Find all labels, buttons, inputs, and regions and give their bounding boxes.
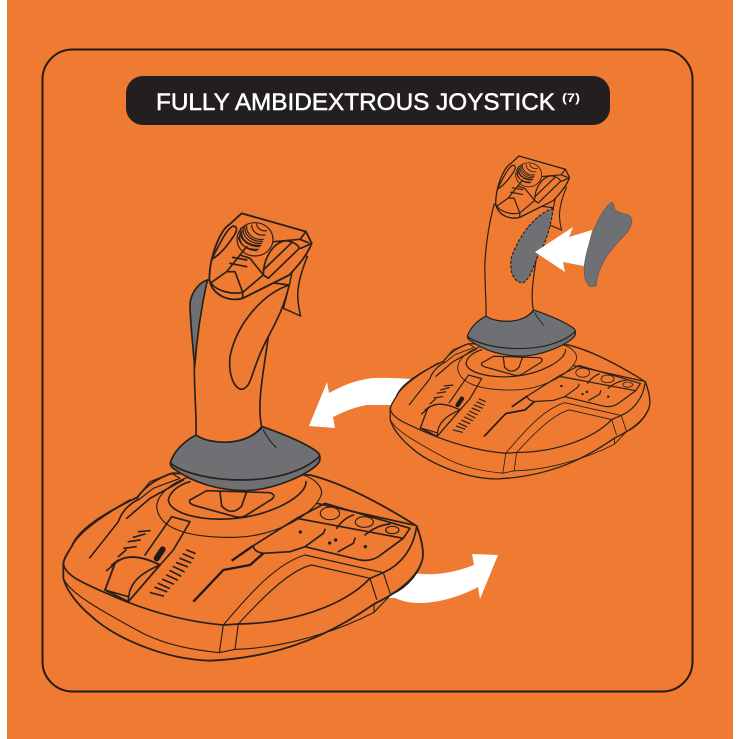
title pill: FULLY AMBIDEXTROUS JOYSTICK: [156, 89, 555, 116]
removable grip piece: [584, 202, 632, 287]
rounded panel frame: [42, 50, 692, 692]
large joystick stick: [170, 213, 320, 491]
small joystick: [390, 156, 650, 479]
arrow: into small joystick: [535, 227, 592, 272]
title pill: [126, 76, 610, 125]
large joystick base: [63, 473, 423, 661]
dashed grip recess on small joystick: [511, 208, 553, 283]
title pill: (7): [562, 91, 580, 105]
small joystick base: [390, 344, 650, 479]
large joystick: [63, 213, 423, 661]
small joystick stick: [467, 156, 576, 356]
arrow: middle curved left: [309, 378, 425, 428]
large joystick finger rest: [230, 285, 289, 389]
large joystick left grip: [190, 280, 207, 367]
arrow: bottom right curved: [375, 554, 498, 603]
